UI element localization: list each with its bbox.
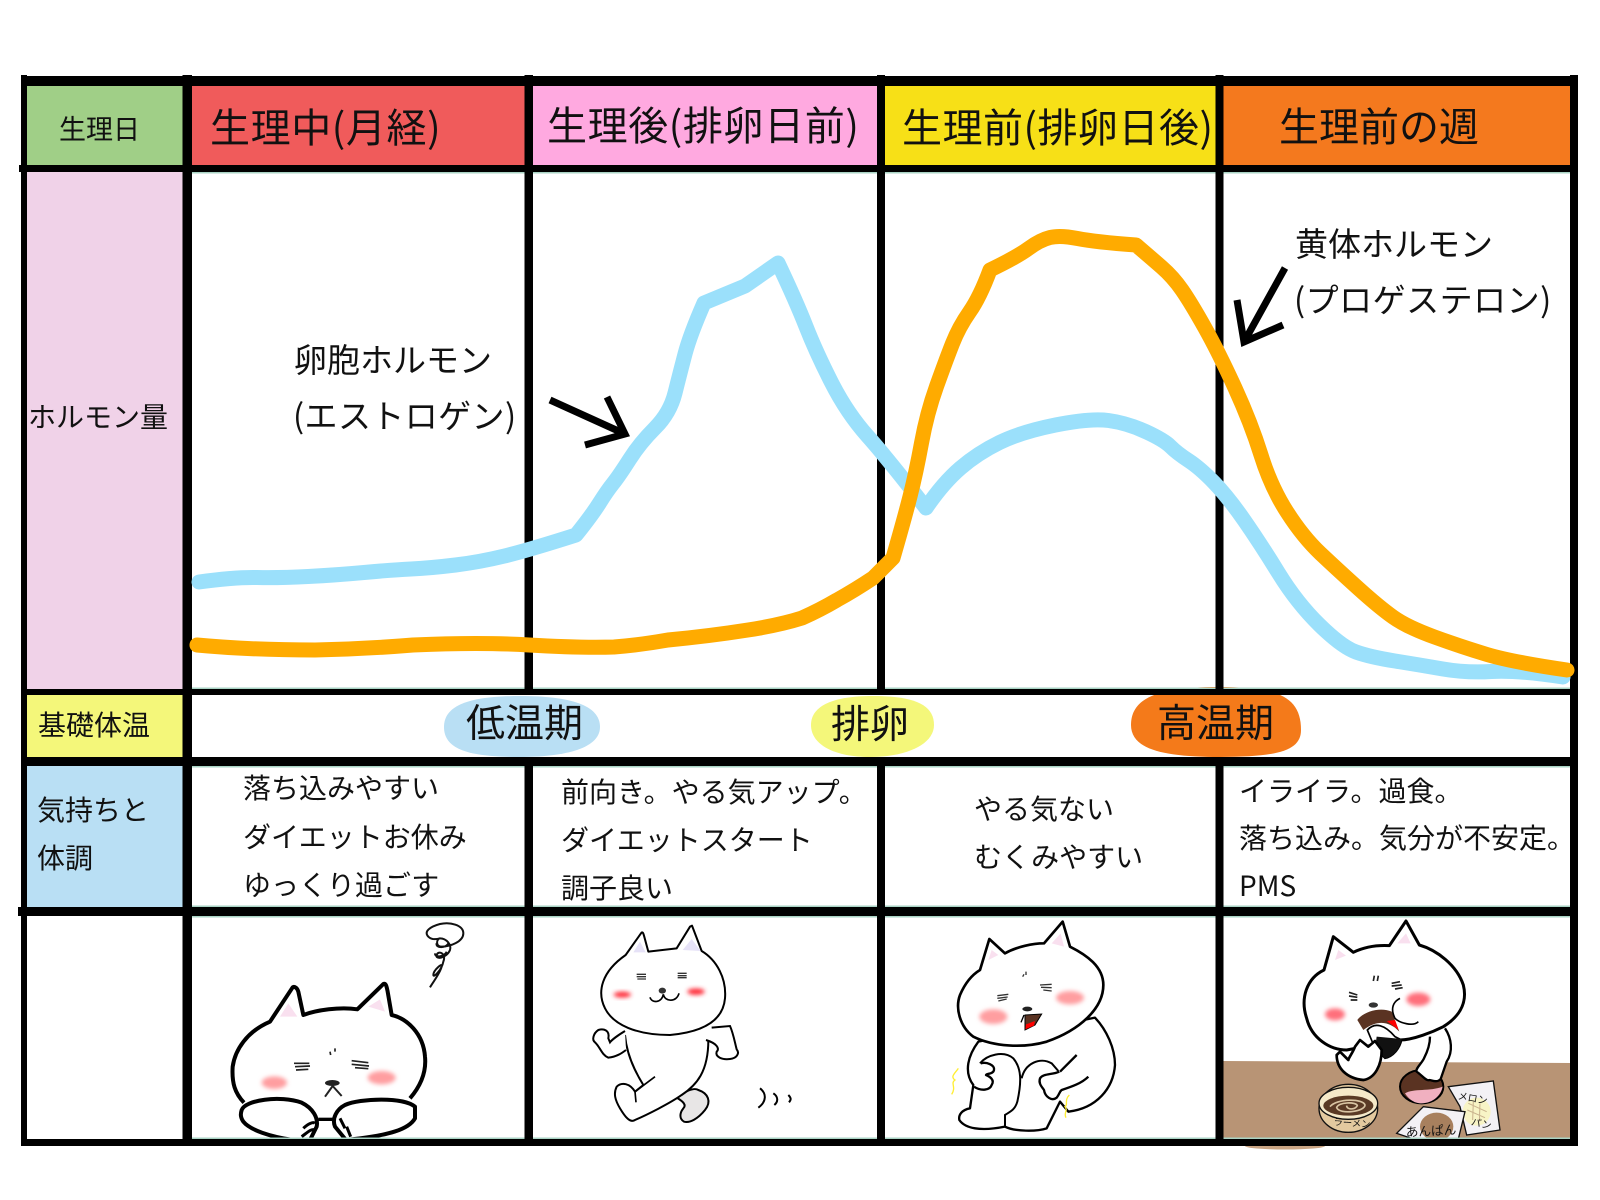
label: progesterone: (プロゲステロン) [1294,274,1552,322]
text block: mood after period: 前向き。やる気アップ。 [561,771,867,811]
decorative: tan smudge below table [1245,1142,1325,1150]
illustration: eating cat with food: メロン [1457,1087,1489,1107]
illustration: eating cat with food: あんぱん [1405,1119,1457,1141]
label: 気持ちと体調: 気持ちと [37,789,149,829]
illustration: running cat [593,926,791,1122]
panel: row label 基礎体温 [25,694,184,758]
label: 気持ちと体調: 体調 [37,837,93,877]
text block: mood before ovulation end: むくみやすい [974,836,1143,876]
text block: mood before ovulation end: やる気ない [974,788,1114,828]
illustration: eating cat with food: ラーメン [1333,1114,1371,1131]
label: 基礎体温: 基礎体温 [38,704,150,744]
illustration: sitting swollen cat [952,922,1115,1131]
illustration: eating cat with food [1304,921,1500,1141]
label: 気持ちと体調 [37,789,149,877]
line chart: estrogen curve [199,263,1563,677]
panel: header cell 生理後 [532,85,878,166]
label: 排卵: 排卵 [831,694,909,750]
text block: mood pre-period week: イライラ。過食。 [1239,770,1462,810]
callout blob: 高温期 [1131,687,1301,757]
text block: mood before ovulation end [974,788,1143,876]
panel: header cell 生理日 [25,85,184,166]
panel: header cell 生理前 [884,85,1217,166]
text block: mood after period: ダイエットスタート [561,819,813,859]
panel: header cell 生理前の週 [1222,85,1571,166]
text block: mood after period [561,771,867,907]
label: ホルモン量: ホルモン量 [28,396,168,436]
text block: mood pre-period week: PMS [1239,865,1296,905]
text block: mood pre-period week: 落ち込み。気分が不安定。 [1239,817,1575,857]
callout blob: 低温期 [444,696,600,757]
label: 高温期: 高温期 [1157,693,1274,749]
label: progesterone [1294,218,1552,322]
panel: row label 気持ちと体調 [25,765,184,908]
text block: mood during period: ゆっくり過ごす [243,864,439,904]
text block: mood during period: ダイエットお休み [243,816,467,856]
arrow: to progesterone curve [1237,268,1285,342]
illustration: sleepy cat [232,923,463,1140]
heading: 生理後(排卵日前): 生理後(排卵日前) [547,94,859,152]
text block: mood pre-period week [1239,770,1575,905]
label: 低温期: 低温期 [466,693,583,749]
heading: 生理日: 生理日 [59,108,140,147]
label: estrogen: (エストロゲン) [293,390,517,438]
panel: header cell 生理中 [189,85,526,166]
line chart: progesterone curve [197,236,1567,670]
text block: mood during period: 落ち込みやすい [243,767,439,807]
illustration: eating cat with food: パン [1470,1113,1493,1132]
heading: 生理前(排卵日後): 生理前(排卵日後) [902,96,1214,154]
text block: mood during period [243,767,467,904]
label: progesterone: 黄体ホルモン [1295,218,1493,266]
heading: 生理中(月経): 生理中(月経) [210,96,441,154]
panel: row label ホルモン量 [25,171,184,690]
label: estrogen: 卵胞ホルモン [294,334,492,382]
callout blob: 排卵 [811,696,934,757]
text block: mood after period: 調子良い [561,867,673,907]
arrow: to estrogen curve [550,397,625,445]
heading: 生理前の週: 生理前の週 [1279,95,1479,153]
panel: table top in eating illustration [1222,1061,1571,1141]
label: estrogen [293,334,517,438]
